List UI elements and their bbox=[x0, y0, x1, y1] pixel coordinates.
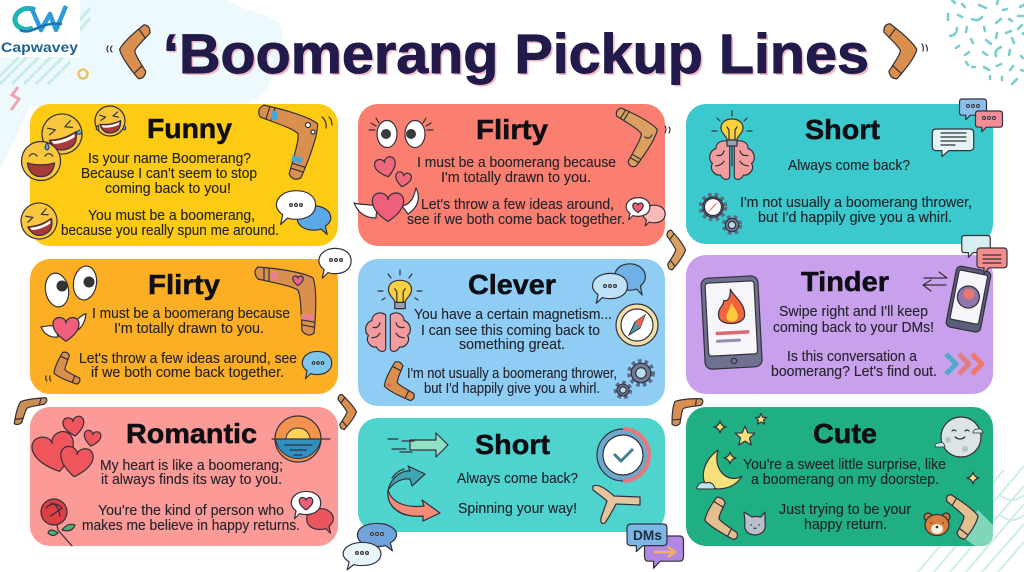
panel: flirty orange bbox=[30, 248, 351, 394]
icon: heart bubble bbox=[291, 491, 333, 533]
icon: DMs bubbles: DMs bbox=[633, 527, 662, 543]
panel: funny bbox=[16, 102, 338, 246]
text block: short lines bbox=[457, 471, 578, 517]
icon: tri-blade boomerang bbox=[593, 485, 640, 523]
heading: romantic: Romantic bbox=[126, 418, 257, 449]
title: ‘Boomerang Pickup Lines bbox=[165, 24, 871, 87]
panel: short top bbox=[686, 99, 1002, 244]
icon: crescent moon bbox=[697, 450, 742, 489]
icon: bear bbox=[924, 513, 950, 536]
decorative ring and squiggle bbox=[11, 70, 88, 110]
text block: short lines: Always come back? bbox=[788, 158, 910, 174]
icon: flirty hearts bbox=[354, 156, 418, 222]
panel: tinder bbox=[686, 236, 1007, 394]
icon: stray boomerang left bbox=[13, 397, 48, 425]
text block: short lines: I'm not usually a boomerang thrower, bbox=[740, 195, 972, 211]
text block: cute lines: a boomerang on my doorstep. bbox=[751, 472, 939, 488]
decorative stripes bottom right bbox=[918, 466, 1024, 572]
icon: title boomerang left bbox=[107, 22, 167, 81]
text block: tinder lines: coming back to your DMs! bbox=[773, 320, 934, 336]
panel: short bottom bbox=[343, 418, 684, 570]
icon: small phone with profile bbox=[945, 265, 992, 333]
icon: DMs bubbles bbox=[627, 524, 684, 568]
icon: chat bubbles bbox=[932, 99, 1002, 157]
text block: cute lines: Just trying to be your bbox=[779, 502, 911, 518]
text block: flirty lines: see if we both come back together. bbox=[407, 212, 625, 228]
text block: romantic lines: it always finds its way to you. bbox=[101, 472, 282, 488]
icon: compass gears bbox=[701, 195, 740, 233]
decorative stripes under logo bbox=[0, 8, 90, 84]
text block: tinder lines: boomerang? Let's find out. bbox=[771, 364, 937, 380]
icon: chat bubbles bbox=[962, 236, 1007, 273]
icon: hearts bbox=[30, 416, 102, 479]
icon: gears bbox=[616, 361, 653, 397]
icon: stray boomerang center left bbox=[327, 393, 358, 431]
text block: short lines: but I'd happily give you a whirl. bbox=[758, 210, 952, 226]
icon: brain with bulb bbox=[710, 111, 754, 179]
logo: Capwavey: Capwavey bbox=[1, 39, 78, 55]
icon: winged heart bbox=[41, 314, 86, 341]
icon: stray boomerang right bbox=[671, 398, 703, 426]
icon: sunset bbox=[272, 416, 330, 462]
panel: romantic bbox=[30, 407, 338, 546]
heading: tinder: Tinder bbox=[801, 266, 889, 297]
icon: curved arrows bbox=[388, 466, 440, 521]
text block: flirty lines: if we both come back together. bbox=[91, 365, 284, 381]
icon: emoji group bbox=[16, 104, 127, 244]
text block: flirty lines: I must be a boomerang because bbox=[92, 306, 290, 322]
text block: tinder lines bbox=[771, 304, 937, 380]
icon: orange boomerang bbox=[255, 265, 316, 336]
icon: chevrons bbox=[946, 354, 982, 374]
text block: romantic lines: makes me believe in happy returns. bbox=[82, 518, 300, 534]
text block: flirty lines: I'm totally drawn to you. bbox=[114, 321, 264, 337]
decorative dashes top right bbox=[948, 0, 1024, 84]
text block: cute lines: You're a sweet little surprise, like bbox=[743, 457, 946, 473]
icon: compass bbox=[616, 304, 658, 346]
icon: flirty boomerang bbox=[596, 106, 670, 169]
background blob bbox=[0, 0, 283, 168]
text block: flirty lines: Let's throw a few ideas around, bbox=[421, 197, 614, 213]
icon: brain with bulb bbox=[366, 270, 422, 351]
icon: phone with flame bbox=[701, 276, 762, 369]
panel: flirty red bbox=[354, 104, 670, 246]
text block: romantic lines: You're the kind of person who bbox=[98, 503, 284, 519]
icon: eyes bbox=[43, 265, 99, 309]
icon: smiling moon bbox=[935, 417, 983, 457]
text block: clever lines: something great. bbox=[459, 337, 565, 353]
icon: stars bbox=[714, 413, 979, 484]
text block: flirty lines: I must be a boomerang because bbox=[417, 155, 616, 171]
text block: romantic lines: My heart is like a boomerang; bbox=[100, 458, 283, 474]
icon: cute boomerang right bbox=[934, 492, 980, 541]
text block: short lines: Always come back? bbox=[457, 471, 578, 487]
panel: cute bbox=[686, 407, 993, 546]
icon: rose bbox=[41, 499, 75, 546]
icon: speed arrow bbox=[388, 433, 448, 457]
icon: flirty eyes bbox=[369, 118, 433, 148]
text block: funny lines: Because I can't seem to stop bbox=[81, 166, 257, 182]
text block: clever lines: You have a certain magnetism... bbox=[414, 307, 612, 323]
text block: flirty lines bbox=[79, 306, 297, 381]
text block: funny lines: because you really spun me around. bbox=[61, 223, 279, 239]
text block: cute lines: happy return. bbox=[804, 517, 887, 533]
heading: short: Short bbox=[805, 114, 880, 145]
icon: chat bubbles bbox=[302, 248, 351, 379]
text block: flirty lines bbox=[407, 155, 625, 228]
title: ‘Boomerang Pickup Lines bbox=[163, 22, 869, 85]
heading: flirty: Flirty bbox=[476, 114, 548, 145]
icon: cat bbox=[744, 512, 765, 535]
text block: romantic lines bbox=[82, 458, 300, 534]
icon: chat bubbles bbox=[592, 264, 645, 303]
decorative stripe corner bbox=[960, 510, 993, 546]
heading: funny: Funny bbox=[147, 113, 232, 144]
icon: small boomerang bbox=[46, 351, 88, 385]
icon: funny boomerang bbox=[242, 102, 332, 181]
logo: Capwavey bbox=[0, 0, 80, 57]
text block: short lines bbox=[740, 158, 972, 226]
text block: funny lines: coming back to you! bbox=[105, 181, 231, 197]
text block: tinder lines: Is this conversation a bbox=[787, 349, 918, 365]
heading: short: Short bbox=[475, 429, 550, 460]
heading: flirty: Flirty bbox=[148, 269, 220, 300]
icon: stray boomerang center right bbox=[655, 228, 687, 272]
text block: funny lines: You must be a boomerang, bbox=[88, 208, 255, 224]
icon: swap arrows bbox=[923, 272, 947, 291]
icon: chat bubbles bottom left bbox=[343, 523, 397, 570]
heading: clever: Clever bbox=[468, 269, 556, 300]
text block: clever lines: I can see this coming back to bbox=[421, 323, 600, 339]
panel: clever bbox=[358, 259, 665, 406]
text block: clever lines: but I'd happily give you a whirl. bbox=[424, 381, 600, 397]
text block: clever lines bbox=[407, 307, 617, 397]
text block: funny lines bbox=[61, 151, 279, 239]
icon: title boomerang right bbox=[866, 21, 927, 81]
icon: clock bbox=[597, 429, 649, 481]
text block: flirty lines: I'm totally drawn to you. bbox=[441, 170, 591, 186]
text block: clever lines: I'm not usually a boomerang thrower, bbox=[407, 366, 617, 382]
icon: cute boomerang left bbox=[703, 495, 749, 541]
icon: flirty heart bubble bbox=[626, 198, 665, 226]
text block: short lines: Spinning your way! bbox=[458, 501, 577, 517]
text block: funny lines: Is your name Boomerang? bbox=[88, 151, 251, 167]
icon: funny chat bubbles bbox=[276, 191, 331, 234]
text block: tinder lines: Swipe right and I'll keep bbox=[779, 304, 928, 320]
heading: cute: Cute bbox=[813, 418, 877, 449]
text block: flirty lines: Let's throw a few ideas around, see bbox=[79, 351, 297, 367]
icon: clever boomerang bbox=[382, 360, 425, 402]
text block: cute lines bbox=[743, 457, 946, 533]
